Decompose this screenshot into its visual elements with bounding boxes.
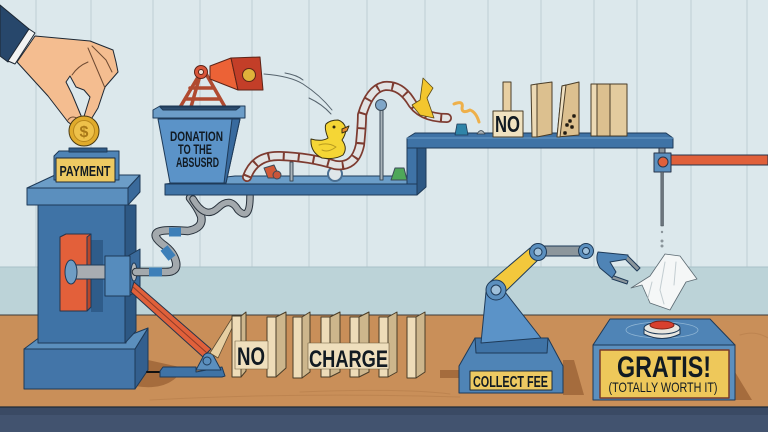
no block with stick: NO: [495, 111, 520, 137]
hand with sleeve: [0, 5, 118, 128]
cuff: [8, 29, 35, 64]
motion lines: [264, 73, 332, 114]
needle with drops: [660, 172, 664, 248]
upper dominoes: [531, 82, 627, 137]
label: gratis: [600, 350, 729, 398]
upper shelf: [407, 133, 673, 148]
panel: lower shelf: [165, 146, 426, 195]
machine cap: [27, 175, 140, 205]
foot pedal with pivot: [147, 353, 225, 377]
orange plate: [60, 234, 91, 311]
plunger rod: [65, 260, 106, 284]
robot arm: [459, 244, 640, 393]
dark floor base strip: [0, 407, 768, 432]
orange squiggle: [454, 103, 479, 122]
machine base: [24, 328, 184, 389]
coin: [69, 116, 99, 146]
coin slot box: [54, 148, 119, 180]
panel: payment machine: [24, 148, 184, 389]
blue clamp block: [105, 249, 140, 296]
label: payment: [56, 158, 115, 182]
donation bin: [153, 106, 245, 183]
label: gratis: (TOTALLY WORTH IT): [608, 379, 718, 395]
muzzle box: [231, 57, 263, 90]
cone: [210, 58, 238, 90]
label: donation to the absurd: DONATION: [170, 128, 223, 144]
label: no (floor): NO: [237, 343, 265, 371]
row of floor dominoes: [232, 312, 425, 378]
track supports and parts: [264, 100, 407, 181]
background wall: [0, 0, 768, 316]
cannon on tripod: [179, 57, 263, 109]
label: payment: PAYMENT: [60, 163, 110, 180]
label: collect fee: [470, 371, 552, 391]
sleeve: [0, 5, 29, 62]
label: charge: CHARGE: [309, 346, 388, 373]
coin: $: [80, 124, 89, 141]
lever arm: [131, 282, 211, 357]
wooden floor: [0, 315, 768, 407]
tripod: [179, 72, 225, 109]
grey dome: [477, 130, 485, 134]
red button: [644, 321, 680, 338]
gratis button box: [593, 319, 735, 400]
label: donation to the absurd: [170, 128, 223, 170]
grey connector and red bar: [654, 148, 768, 172]
label: donation to the absurd: ABSUSRD: [176, 154, 219, 170]
label: gratis: GRATIS!: [617, 351, 711, 384]
roller coaster track: [247, 86, 447, 177]
hose: [136, 196, 250, 272]
small cup: [455, 124, 468, 135]
tan strut: [210, 318, 232, 358]
label: donation to the absurd: TO THE: [178, 141, 212, 157]
hand: [17, 36, 118, 128]
floor shadows: [440, 360, 752, 400]
no block with stick: [493, 82, 523, 137]
tissue: [631, 254, 697, 310]
machine column: [38, 205, 136, 343]
label: collect fee: COLLECT FEE: [473, 374, 548, 391]
rubber duck: [311, 120, 349, 159]
yellow flag: [412, 78, 434, 118]
